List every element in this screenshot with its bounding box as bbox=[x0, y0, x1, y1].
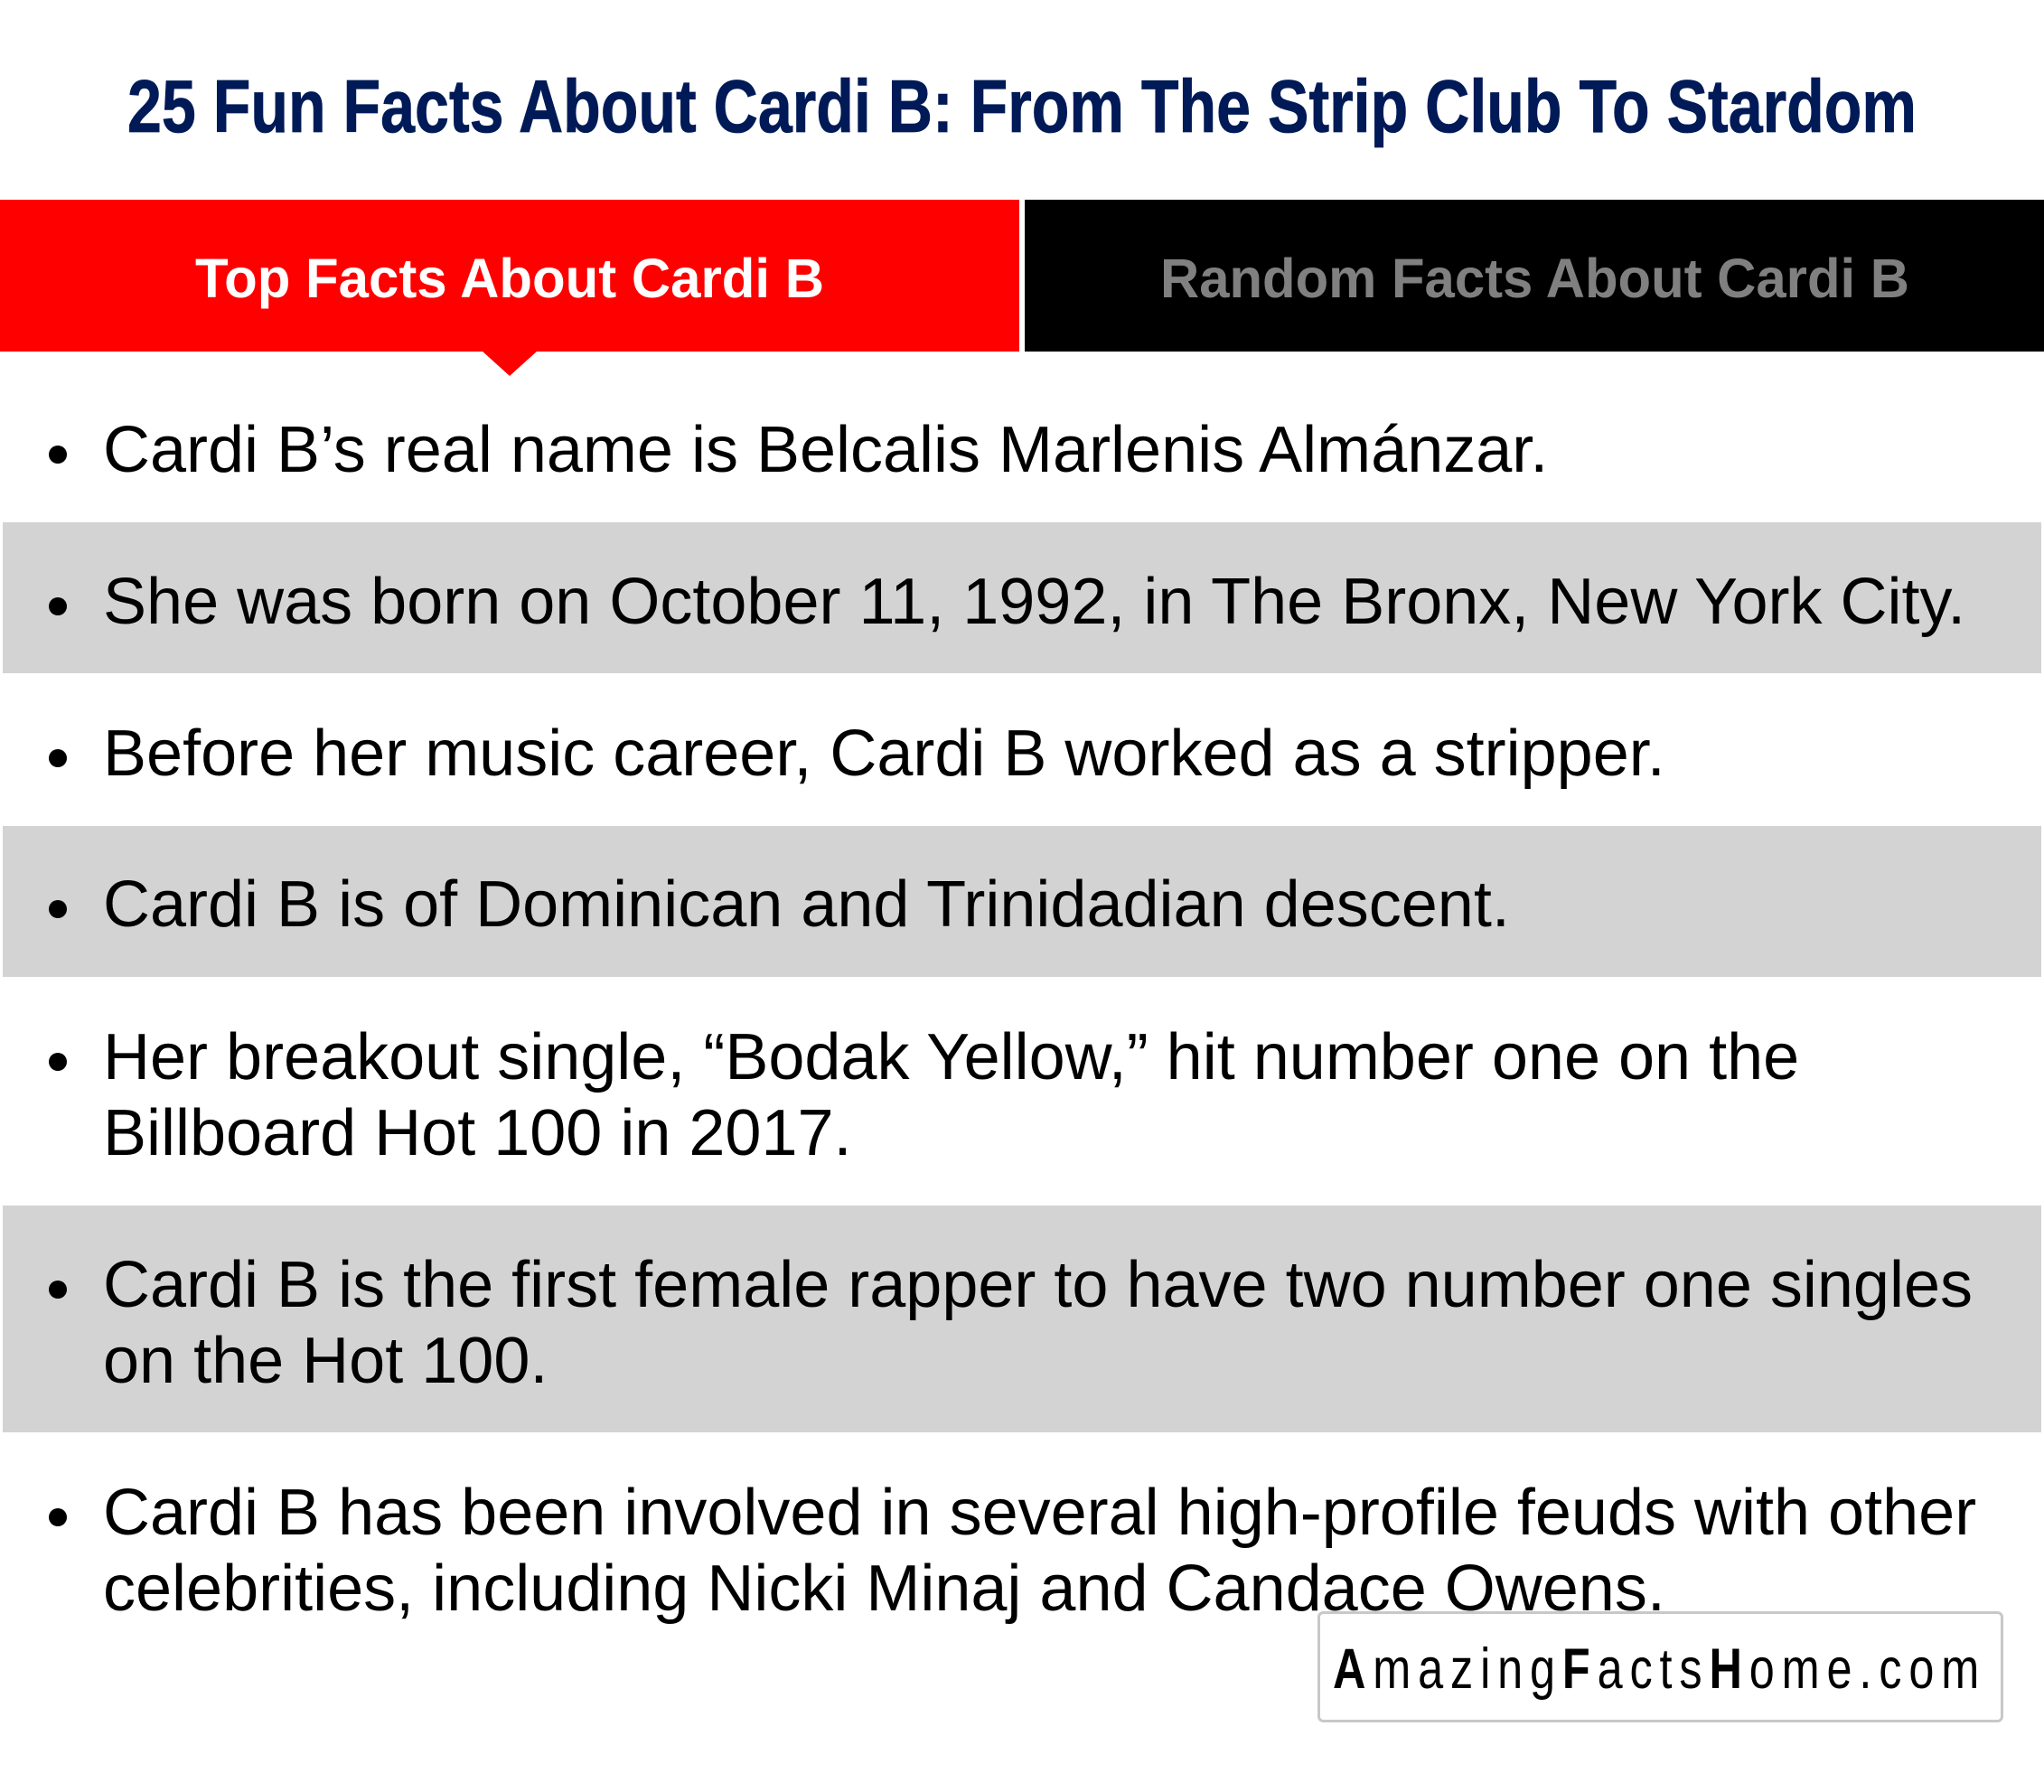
watermark badge bbox=[1319, 1612, 2002, 1721]
fact row 7: Cardi B has been involved in several high-profile feuds with other bbox=[103, 1477, 1976, 1549]
fact row 5: Her breakout single, “Bodak Yellow,” hit number one on the bbox=[103, 1021, 1799, 1093]
fact row 6 bbox=[3, 1206, 2041, 1432]
fact row 2 bbox=[3, 522, 2041, 673]
fact row 5 bbox=[49, 1021, 1799, 1169]
watermark badge: AmazingFactsHome.com bbox=[1333, 1637, 1979, 1701]
tab: random facts bbox=[1025, 200, 2044, 352]
fact row 7: celebrities, including Nicki Minaj and Candace Owens. bbox=[103, 1553, 1665, 1625]
fact row 1: Cardi B’s real name is Belcalis Marlenis Almánzar. bbox=[103, 414, 1548, 486]
tab: top facts (active): Top Facts About Cardi B bbox=[195, 248, 824, 309]
fact row 6: on the Hot 100. bbox=[103, 1325, 548, 1397]
fact row 4 bbox=[3, 826, 2041, 977]
fact row 3: Before her music career, Cardi B worked as a stripper. bbox=[103, 718, 1665, 790]
tab: random facts: Random Facts About Cardi B bbox=[1160, 248, 1909, 309]
fact row 2: She was born on October 11, 1992, in The Bronx, New York City. bbox=[103, 566, 1965, 638]
fact row 7 bbox=[49, 1477, 1976, 1625]
fact row 4: Cardi B is of Dominican and Trinidadian descent. bbox=[103, 868, 1510, 941]
fact row 6: Cardi B is the first female rapper to have two number one singles bbox=[103, 1249, 1973, 1321]
fact row 5: Billboard Hot 100 in 2017. bbox=[103, 1097, 852, 1169]
tab: top facts (active) bbox=[0, 200, 1019, 376]
